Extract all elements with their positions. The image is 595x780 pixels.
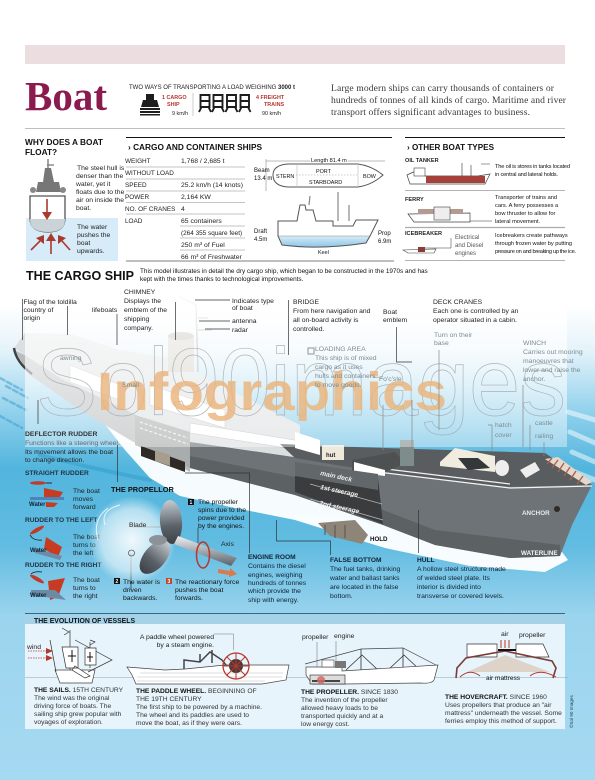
step 2: 2 [116, 579, 118, 585]
oil tanker: OIL TANKER [405, 158, 439, 164]
propeller: transported quickly and at a [301, 713, 383, 720]
diagram: side elevation [254, 192, 391, 256]
icon: ship [140, 94, 160, 116]
propeller: The invention of the propeller [301, 697, 388, 704]
title: Boat [25, 73, 107, 119]
ship: superstructure deck [14, 333, 300, 458]
paddle wheel [127, 634, 289, 727]
ship: hut [295, 432, 344, 460]
diagram: top plan: PORT [316, 169, 332, 175]
cargo ship label: 1 CARGO [162, 95, 187, 101]
diagram: top plan: STERN [276, 174, 294, 180]
label: false bottom: water and ballast tanks [329, 575, 400, 582]
arrow: reaction [218, 568, 237, 577]
text: steel hull: floats due to the [76, 189, 125, 196]
rudder to the right: turns to [73, 585, 96, 592]
diagram: top plan: Length 81.4 m [311, 158, 347, 164]
illustration: propeller [134, 499, 237, 579]
ship: hatch cover [440, 448, 495, 472]
paddle wheel: BEGINNING OF [206, 688, 257, 695]
propeller: low energy cost. [301, 721, 349, 728]
propeller: propeller [302, 634, 329, 641]
label: boat type: Indicates type [232, 298, 274, 305]
diagram: top plan [254, 158, 385, 191]
specification table: NO. OF CRANES [125, 206, 175, 213]
hovercraft: propeller [519, 632, 546, 639]
paddle wheel: THE PADDLE WHEEL. [136, 688, 206, 695]
panel: other boat types [403, 138, 576, 260]
label: turn on base: base [434, 340, 449, 347]
icebreaker: Icebreakers create pathways [495, 233, 568, 239]
label: deck cranes: operator situated in a cabin. [433, 317, 517, 324]
label: flag: Flag of the toldilla [24, 299, 77, 306]
text: steel hull: denser than the [76, 173, 123, 180]
straight rudder: moves [73, 496, 94, 503]
description: to change direction. [25, 457, 84, 464]
label: loading area [308, 346, 377, 389]
trains label: TRAINS [264, 102, 284, 108]
label: hatch cover: hatch [495, 422, 512, 429]
oil tanker: The oil is stores in tanks located [495, 164, 570, 170]
water block [26, 218, 118, 261]
hovercraft: Uses propellers that produce an "air [445, 702, 552, 709]
ferry: FERRY [405, 197, 424, 203]
image credit: ©Sol 90 Images [568, 695, 574, 728]
label: blade: Blade [129, 522, 147, 529]
straight rudder: STRAIGHT RUDDER [25, 470, 89, 477]
label: chimney: shipping [124, 316, 150, 323]
label: boat type: of boat [232, 305, 253, 312]
label: decks: 1st steerage [320, 484, 359, 499]
label: antenna radar: radar [232, 327, 249, 334]
oil tanker: in central and lateral holds. [495, 172, 558, 178]
trains label: 4 FREIGHT [256, 95, 284, 101]
ship: pale stern hull [14, 350, 190, 472]
label: false bottom: FALSE BOTTOM [330, 557, 382, 564]
icebreaker: pressure on and breaking up the ice. [495, 249, 576, 255]
label: hull: HULL [417, 557, 435, 564]
icebreaker: engines [455, 251, 476, 257]
ship: dark hull [190, 442, 592, 558]
ship: forecastle stripes [545, 457, 592, 485]
label: chimney: emblem of the [124, 307, 167, 314]
propeller: engine [334, 633, 355, 640]
arrows: forces [31, 199, 70, 254]
top divider [25, 128, 565, 130]
label: chimney: company. [124, 325, 153, 332]
specification table: (264 355 square feet) [181, 230, 242, 237]
specification table: LOAD [125, 218, 143, 225]
label: engine room: ENGINE ROOM [248, 554, 296, 561]
ferry [405, 195, 559, 225]
label: hull: interior is divided into [417, 584, 481, 591]
heading: WHY DOES A BOAT [25, 137, 103, 147]
label: boat emblem: emblem [383, 317, 408, 324]
specification table: 1,768 / 2,685 t [181, 158, 225, 165]
label: winch: WINCH [523, 340, 546, 347]
specification table: 2,164 KW [181, 194, 211, 201]
diagram: top plan: 13.4 m [254, 176, 272, 182]
step 2: The water is [123, 579, 161, 586]
specification table: SPEED [125, 182, 147, 189]
specification table: 65 containers [181, 218, 222, 225]
intro paragraph: transport offers significant advantages to business. [331, 107, 530, 118]
description: Its movement allows the boat [25, 449, 113, 456]
panel: the propellor [88, 485, 246, 602]
rudder to the right: The boat [73, 577, 100, 584]
step 3 [166, 578, 239, 602]
heading: the cargo ship: THE CARGO SHIP [26, 268, 134, 283]
straight rudder [25, 470, 100, 511]
label: bridge: From here navigation and [293, 308, 371, 315]
label: hold: HOLD [370, 536, 388, 543]
label: winch: anchor. [523, 376, 545, 383]
ship: mast [178, 296, 212, 372]
hovercraft: ferries employ this method of support. [445, 718, 557, 725]
description: Functions like a steering wheel. [25, 440, 120, 447]
hovercraft: air [501, 631, 509, 638]
panel: the evolution of vessels [25, 614, 568, 729]
label: false bottom: The fuel tanks, drinking [330, 566, 400, 573]
label: antenna radar: antenna [232, 318, 257, 325]
label: castle railing: castle [535, 420, 553, 427]
label: loading area: This ship is of mixed [315, 355, 377, 362]
diagram: top plan: Beam [254, 168, 270, 174]
divider [192, 93, 194, 116]
label: false bottom: bottom. [330, 593, 353, 600]
text: steel hull: The steel hull is [77, 165, 125, 172]
paddle wheel: THE 19TH CENTURY [136, 696, 202, 703]
ferry: Transporter of trains and [495, 195, 557, 201]
step 1: power provided [198, 515, 245, 522]
icon: warship section [30, 159, 66, 232]
icebreaker: and Diesel [455, 243, 483, 249]
top pink band [25, 45, 565, 64]
label: bridge: all on-board activity is [293, 317, 359, 324]
label: engine room: which provide the [247, 588, 301, 595]
step 2 [114, 578, 161, 602]
cargo ship description: This model illustrates in detail the dry cargo ship, which began to be constructed in the 1970s and has [140, 268, 428, 275]
label: waterline: WATERLINE [521, 550, 558, 557]
hovercraft [445, 631, 562, 725]
straight rudder: The boat [73, 488, 100, 495]
propeller: allowed heavy loads to be [301, 705, 378, 712]
paddle wheel: The wheel and its paddles are used to [136, 712, 249, 719]
label: flag: origin [24, 315, 40, 322]
foam wake [100, 418, 568, 572]
specification table: 66 m³ of Freshwater [181, 254, 243, 261]
specification table: POWER [125, 194, 150, 201]
label: engine room: ship with energy. [248, 597, 299, 604]
sails: wind [26, 644, 41, 651]
icebreaker: Electrical [455, 235, 479, 241]
ferry: bow thruster to allow for [495, 211, 555, 217]
heading: › CARGO AND CONTAINER SHIPS [128, 142, 262, 152]
panel: why does a boat float [25, 137, 125, 261]
heading: THE EVOLUTION OF VESSELS [34, 618, 135, 625]
label: castle railing: railing [535, 433, 553, 440]
step 1: spins due to the [198, 507, 246, 514]
straight rudder: forward [73, 504, 96, 511]
diagram: side elevation: 6.9m [378, 239, 391, 245]
ship: cutaway cabins [135, 415, 190, 472]
label: axis: Axis [221, 541, 234, 548]
label: hut: hut [326, 453, 335, 459]
wave streaks [0, 378, 595, 480]
diagram: side elevation: Draft [254, 229, 267, 235]
heading: DEFLECTOR RUDDER [25, 431, 97, 438]
diagram: side elevation: Prop [378, 231, 391, 237]
icebreaker [403, 231, 576, 257]
ship: stern rim [14, 348, 32, 374]
cargo ship label: SHIP [167, 102, 180, 108]
label: winch: manoeuvres that [523, 358, 574, 365]
label: loading area: hulls and containers [315, 373, 376, 380]
ship: deck blocks [352, 440, 540, 478]
ship: chimney [168, 332, 194, 372]
heading: FLOAT? [25, 147, 57, 157]
label: boat emblem: Boat [383, 309, 397, 316]
text: water pushes: pushes the [77, 232, 110, 239]
sails: 15TH CENTURY [71, 687, 124, 694]
label: chimney: CHIMNEY [124, 289, 155, 296]
step 3: 3 [168, 579, 170, 585]
label: loading area: cargo as it uses [315, 364, 363, 371]
intro paragraph: hundreds of tonnes of all kinds of cargo. Maritime and river [331, 95, 567, 106]
specification table: WEIGHT [125, 158, 151, 165]
text: steel hull: boat. [76, 205, 91, 212]
sails: voyages of exploration. [34, 719, 103, 726]
ring: rotation [196, 542, 210, 568]
text: water pushes: The water [77, 224, 108, 231]
hovercraft: SINCE 1960 [508, 694, 547, 701]
label: decks [318, 470, 360, 515]
diagram: side elevation: 4.5m [254, 237, 267, 243]
watermark infographics: Infographics [97, 362, 447, 422]
heading: THE PROPELLOR [111, 485, 174, 494]
label: winch: lower and raise the [523, 367, 581, 374]
label: anchor: ANCHOR [522, 510, 550, 517]
rudder to the right: the right [73, 593, 98, 600]
step 2: driven [123, 587, 142, 594]
text: steel hull: water, yet it [75, 181, 110, 188]
ship: hull shading [190, 456, 560, 558]
intro paragraph: Large modern ships can carry thousands of containers or [331, 83, 555, 94]
diagram: top plan: STARBOARD [309, 180, 342, 186]
specification table: 250 m³ of Fuel [181, 242, 225, 249]
ferry: cars. A ferry possesses a [495, 203, 559, 209]
step 2: backwards. [123, 595, 157, 602]
hovercraft: air mattress [486, 675, 521, 682]
propeller: THE PROPELLER. [301, 689, 359, 696]
straight rudder: Water [29, 502, 46, 508]
rudder to the left: The boat [73, 534, 100, 541]
icebreaker: ICEBREAKER [405, 231, 442, 237]
sails: sailing ship grew popular with [34, 711, 122, 718]
ferry: lateral movement. [495, 219, 541, 225]
label: false bottom: are located in the false [330, 584, 399, 591]
icon: trains [199, 95, 250, 112]
step 1: by the engines. [198, 523, 244, 530]
watermark outline: Sol90images [36, 329, 566, 436]
ship: hull cutaway [295, 462, 383, 544]
sails [26, 628, 124, 726]
rudder to the right [25, 562, 101, 600]
rudder to the right: RUDDER TO THE RIGHT [25, 562, 101, 569]
rudder to the left [25, 517, 100, 560]
panel: deflector rudder [25, 431, 120, 600]
specification table: 25.2 km/h (14 knots) [181, 182, 243, 189]
label: bridge: BRIDGE [293, 299, 319, 306]
hovercraft: THE HOVERCRAFT. [445, 694, 508, 701]
rudder to the left: turns to [73, 542, 96, 549]
label: hull: transverse or covered levels. [417, 593, 504, 600]
leader lines [22, 299, 544, 590]
transport comparison [129, 84, 296, 117]
step 3: forwards. [175, 595, 203, 602]
label: loading area: LOADING AREA [315, 346, 366, 353]
diagram: top plan: BOW [363, 174, 377, 180]
step 1: The propeller [198, 499, 239, 506]
rudder to the right: Water [30, 593, 47, 599]
cargo ship illustration [14, 296, 592, 558]
diagram: side elevation: Keel [318, 250, 329, 256]
label: small: Small [122, 382, 139, 389]
step 3: The reactionary force [175, 579, 239, 586]
cargo ship label: 9 km/h [172, 111, 188, 117]
label: turn on base: Turn on their [434, 332, 472, 339]
label: fo'c'sle: Fo'c'sle [379, 376, 402, 383]
text: water pushes: boat [77, 240, 90, 247]
step 3: pushes the boat [175, 587, 223, 594]
ship: anchor [554, 506, 560, 512]
label: flag: country of [24, 307, 53, 314]
text: steel hull: air on inside the [76, 197, 124, 204]
label: hull: A hollow steel structure made [417, 566, 506, 573]
rudder to the left: the left [73, 550, 94, 557]
ship: accommodation blocks [70, 365, 300, 450]
label: decks: main deck [320, 470, 353, 484]
cargo ship description: kept with the times thanks to technological improvements. [140, 276, 304, 283]
propeller: SINCE 1830 [359, 689, 398, 696]
label: decks: 2nd steerage [318, 500, 360, 515]
rudder to the left: Water [30, 548, 47, 554]
specification table: WITHOUT LOAD [125, 170, 174, 177]
label: bridge: controlled. [293, 326, 324, 333]
ship: deck [280, 444, 592, 487]
sails: driving force of boats. The [34, 703, 111, 710]
label: lifeboats: lifeboats [92, 307, 118, 314]
comparison heading: TWO WAYS OF TRANSPORTING A LOAD WEIGHING 3000 t [129, 84, 296, 91]
label: deck cranes: Each one is controlled by an [433, 308, 519, 315]
trains label: 90 km/h [262, 111, 281, 117]
specification table [125, 158, 245, 261]
paddle wheel: A paddle wheel powered [140, 634, 214, 641]
specification table: 4 [181, 206, 185, 213]
label: engine room: engines, weighing [248, 572, 303, 579]
label: hull: of welded steel plate. Its [417, 575, 491, 582]
hovercraft: mattress" underneath the vessel. Some [445, 710, 562, 717]
paddle wheel: move the boat, as if they were oars. [136, 720, 242, 727]
white ring [128, 550, 134, 556]
paddle wheel: by a steam engine. [157, 642, 214, 649]
label: chimney: Displays the [124, 298, 161, 305]
oil tanker [405, 158, 570, 184]
sails: THE SAILS. [34, 687, 71, 694]
ship: rail [378, 468, 592, 488]
label: deck cranes: DECK CRANES [433, 299, 482, 306]
water swirl [88, 496, 176, 584]
icebreaker: through frozen water by putting [495, 241, 572, 247]
panel: cargo and container ships [125, 138, 394, 261]
label: engine room: Contains the diesel [248, 563, 306, 570]
paddle wheel: The first ship to be powered by a machine. [136, 704, 262, 711]
rudder to the left: RUDDER TO THE LEFT [25, 517, 97, 524]
propeller [301, 633, 438, 728]
label: awning: awning [60, 355, 82, 362]
text: water pushes: upwards. [77, 248, 105, 255]
step 1 [188, 499, 246, 530]
heading: › OTHER BOAT TYPES [407, 142, 494, 152]
label: hatch cover: cover [495, 432, 512, 439]
translucent label panel [25, 290, 567, 447]
step 1: 1 [190, 500, 192, 506]
label: winch: Carries out mooring [523, 349, 583, 356]
label: loading area: to move goods. [315, 382, 362, 389]
sails: The wind was the original [34, 695, 110, 702]
label: engine room: hundreds of tonnes [248, 580, 307, 587]
